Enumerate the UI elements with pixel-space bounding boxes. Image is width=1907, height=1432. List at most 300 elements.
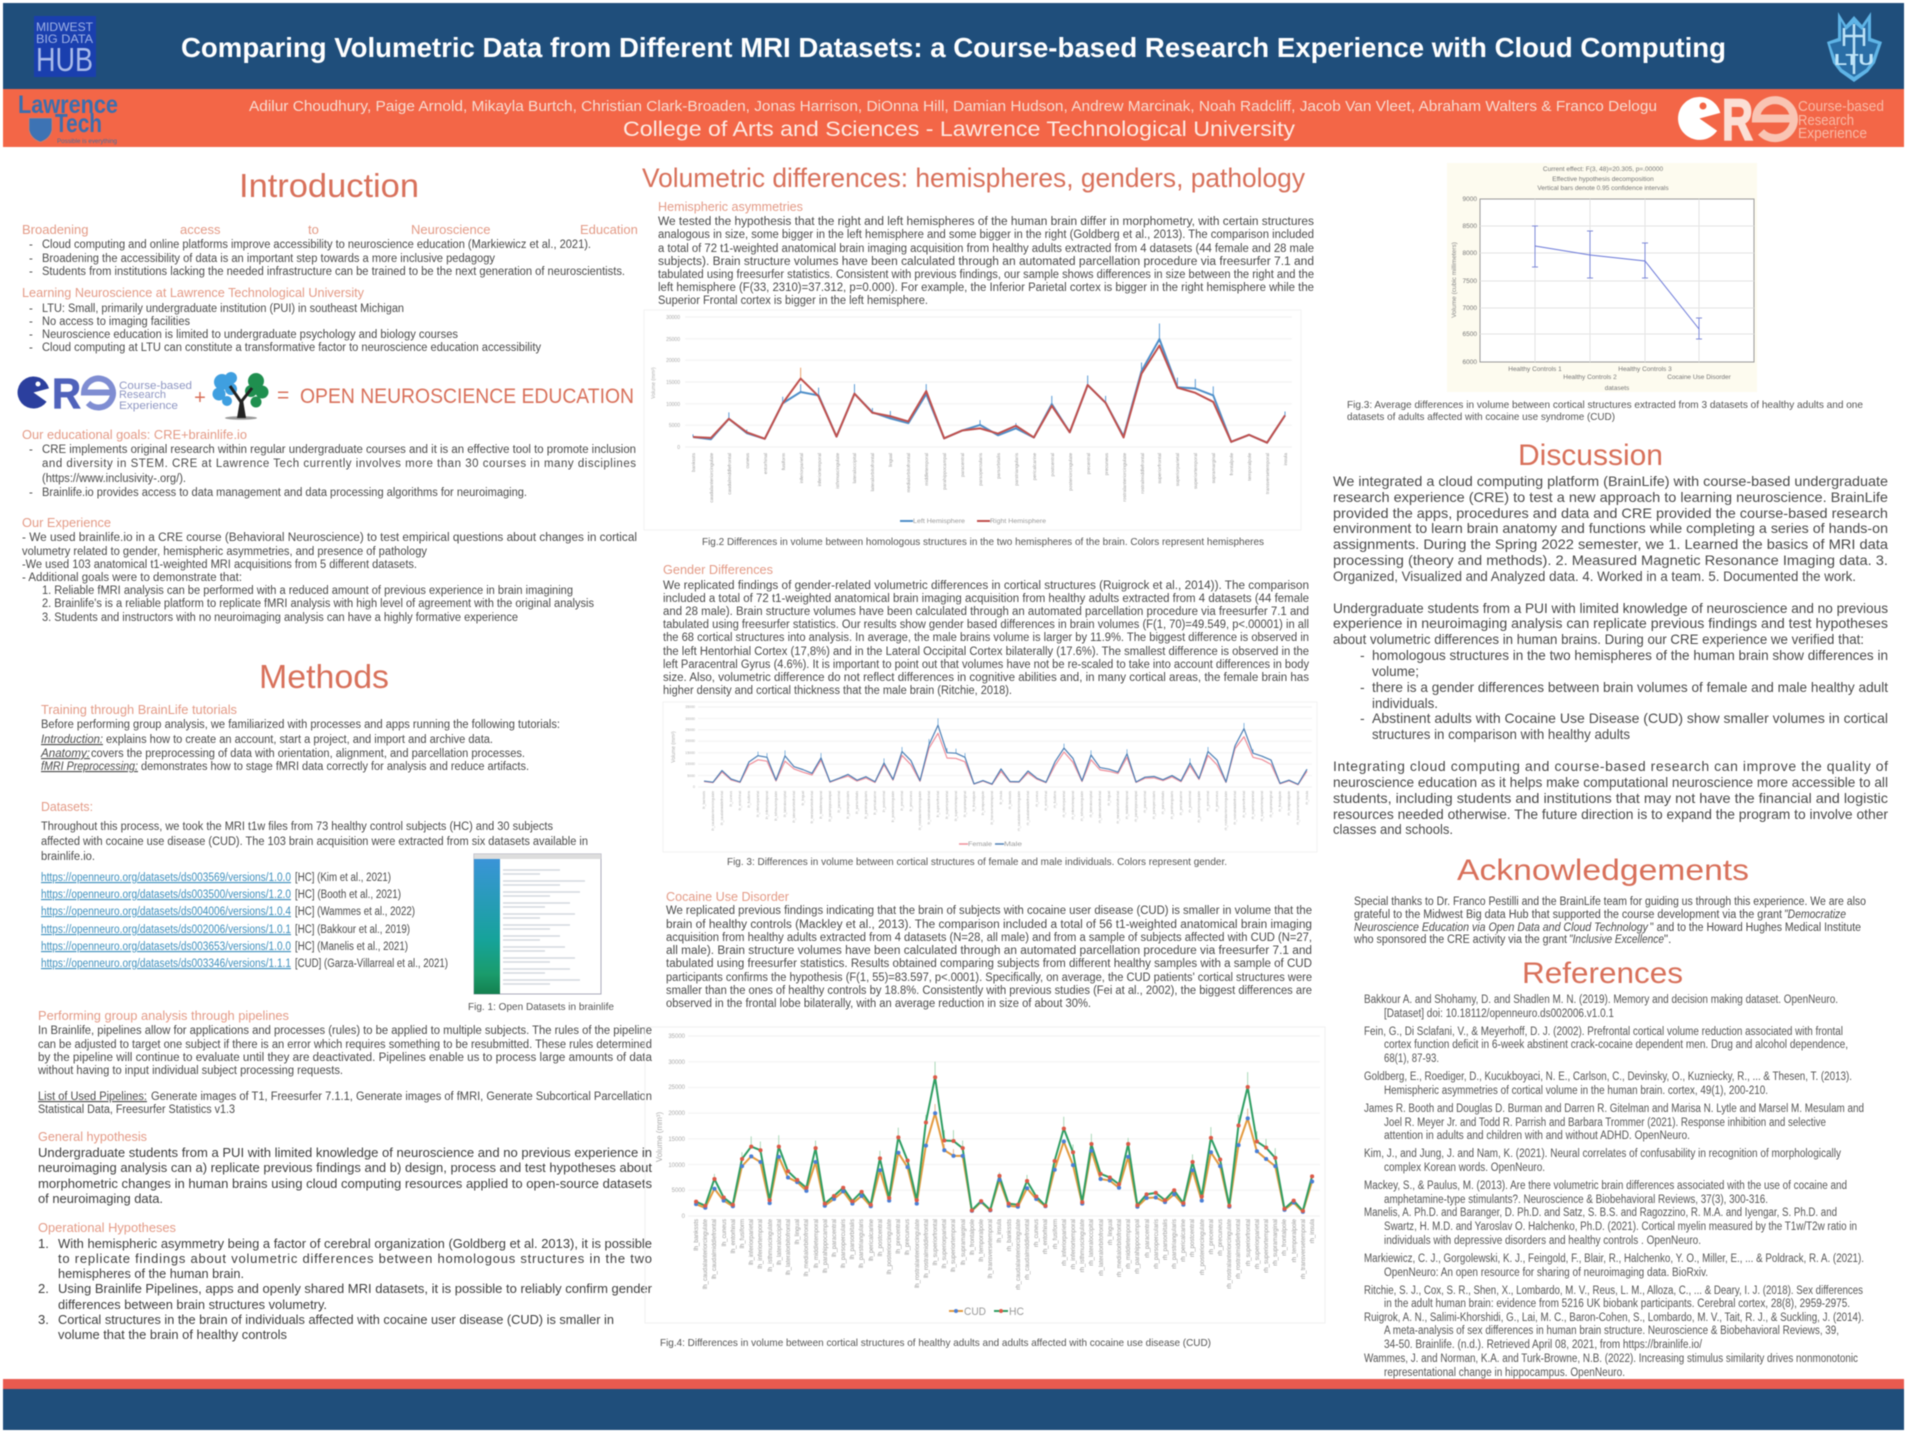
- x axis labels: middletemporal: [924, 453, 930, 486]
- x axis labels: rh_rostralmiddlefrontal: [1233, 791, 1237, 825]
- logo: LTU crest: LTU: [1834, 52, 1874, 69]
- text block: acknowledgements body: ".: [1664, 934, 1671, 946]
- text block: pipelines: Generate images of T1, Freesurfer 7.1.1, Generate images of fMRI, Generate Subcortical Parcellation: [151, 1091, 652, 1103]
- axis tick labels: 5000: [672, 1188, 686, 1194]
- text block: datasets: affected with cocaine use disease (CUD). The 103 brain acquisition were extracted from six datasets available in: [41, 836, 588, 848]
- text block: our experience: - We used brainlife.io in a CRE course (Behavioral Neuroscience) to test empirical questions about changes in cortical: [22, 532, 637, 544]
- x axis labels: lh_posteriorcingulate: [891, 791, 895, 822]
- x axis labels: rh_parsorbitalis: [1163, 1219, 1169, 1260]
- text block: discussion body: there is a gender differences between brain volumes of female and male healthy adult: [1372, 679, 1888, 695]
- text block: educational goals: -: [29, 487, 33, 499]
- text block: discussion body: We integrated a cloud computing platform (BrainLife) with course-based undergraduate: [1333, 473, 1888, 489]
- text block: acknowledgements body: who sponsored the CRE activity via the grant: [1353, 934, 1568, 946]
- text block: our experience: [22, 515, 637, 624]
- text block: gender differences: tabulated using freesurfer statistics. Our results show gender based differences in brain volumes (F(1, 70)=49.549, p<.00001) in all: [663, 619, 1309, 631]
- text block: operational hypotheses: With hemispheric asymmetry being a factor of cerebral organization (Goldberg et al. 2013), it is possible: [58, 1236, 652, 1251]
- text block: discussion body: research experience (CRE) to test a new approach to learning neuroscience. BrainLife: [1333, 489, 1888, 505]
- text block: datasets: [HC] (Manelis et al., 2021): [295, 941, 408, 953]
- x axis labels: rh_parsopercularis: [1152, 791, 1156, 819]
- axis tick labels: 30000: [685, 717, 695, 721]
- x axis labels: rh_inferiortemporal: [1071, 1219, 1077, 1269]
- reference list: 34-50. Brainlife. (n.d.). Retrieved April 08, 2021, from https://brainlife.io/: [1384, 1339, 1703, 1351]
- text block: our experience: - Additional goals were to demonstrate that:: [22, 572, 242, 584]
- caption: figure 4: Fig.4: Differences in volume between cortical structures of healthy adults and adults affected with cocaine use disease (CUD): [660, 1337, 1211, 1349]
- x axis labels: isthmuscingulate: [835, 453, 841, 489]
- text block: discussion body: homologous structures in the two hemispheres of the human brain show differences in: [1372, 647, 1888, 663]
- text block: discussion body: processing (theory and methods). 2. Measured Magnetic Resonance Imaging data. 3.: [1333, 552, 1888, 568]
- x axis labels: rh_caudalanteriorcingulate: [1017, 791, 1021, 831]
- x axis labels: rh_parstriangularis: [1172, 1219, 1178, 1269]
- axis tick labels: 10000: [666, 402, 680, 408]
- x axis labels: lh_caudalmiddlefrontal: [712, 1219, 718, 1279]
- logo: CRE: Experience: [119, 400, 178, 412]
- x axis labels: lh_superiorparietal: [945, 791, 949, 819]
- reference list: OpenNeuro: An open resource for sharing of neuroimaging data. BioRxiv.: [1384, 1267, 1708, 1279]
- x axis labels: rh_entorhinal: [1044, 791, 1048, 811]
- x axis labels: lh_rostralanteriorcingulate: [915, 1218, 921, 1288]
- x axis labels: lh_insula: [997, 1218, 1003, 1243]
- text block: datasets: [41, 799, 588, 970]
- x axis labels: lh_superiorfrontal: [933, 1219, 939, 1265]
- figure: average volume by dataset chart: [1447, 163, 1757, 392]
- header title bar: [3, 3, 1904, 89]
- panel: introduction: [18, 167, 638, 624]
- reference list: representational change in hippocampus. OpenNeuro.: [1384, 1367, 1625, 1379]
- x axis labels: lh_bankssts: [694, 1219, 700, 1251]
- text block: hemispheric asymmetries: analogous in size, some bigger in the left hemisphere and some bigger in the right (Goldberg et al., 2013). The comparison included: [658, 229, 1314, 241]
- x axis labels: lh_lingual: [795, 1219, 801, 1244]
- axis tick labels: 20000: [666, 358, 680, 364]
- x axis labels: lh_parahippocampal: [828, 791, 832, 822]
- x axis labels: rh_precuneus: [1215, 791, 1219, 812]
- x axis labels: rh_isthmuscingulate: [1080, 1218, 1086, 1272]
- text block: datasets: [CUD] (Garza-Villarreal et al., 2021): [295, 958, 448, 970]
- text block: discussion body: Integrating cloud computing and course-based research can improve the quality of: [1333, 758, 1888, 774]
- reference list: A meta-analysis of sex differences in human brain structure. Neuroscience & Biobehavioral Reviews, 39,: [1384, 1325, 1839, 1337]
- text block: learning neuroscience at LTU: -: [29, 303, 33, 315]
- x axis labels: inferiortemporal: [817, 453, 823, 486]
- x axis labels: lingual: [888, 453, 894, 467]
- text block: datasets: [HC] (Booth et al., 2021): [295, 889, 401, 901]
- x axis labels: frontalpole: [1229, 453, 1235, 475]
- text block: acknowledgements body: grateful to the Midwest Big data Hub that supported the course development via the grant: [1354, 909, 1783, 921]
- x axis labels: rh_inferiorparietal: [1062, 1219, 1068, 1266]
- x axis labels: caudalmiddlefrontal: [727, 453, 733, 495]
- text block: hemispheric asymmetries: tabulated using freesurfer statistics. Consistent with previous findings, our sample shows differences in size between the right and the: [658, 269, 1314, 281]
- axis tick labels: [666, 315, 680, 451]
- text block: operational hypotheses: Using Brainlife Pipelines, apps and openly shared MRI datasets, it is possible to reliably confirm gender: [58, 1281, 653, 1296]
- x axis labels: lh_inferiortemporal: [758, 1219, 764, 1269]
- text block: cocaine use disorder: brain of healthy controls (Mackley et al., 2013). The comparison included a total of 56 t1-weighted anatomical brain imaging: [666, 919, 1312, 931]
- x axis labels: lh_inferiorparietal: [749, 1219, 755, 1265]
- x axis labels: lh_parsopercularis: [841, 1219, 847, 1268]
- y tick labels: [1463, 196, 1477, 366]
- x axis labels: rh_superiorparietal: [1251, 791, 1255, 819]
- text block: discussion body: -: [1360, 679, 1365, 695]
- text block: tutorials: Anatomy:: [40, 748, 90, 760]
- logo: Midwest Big Data Hub: HUB: [36, 41, 93, 78]
- x axis labels: entorhinal: [763, 453, 769, 474]
- x axis labels: lh_paracentral: [837, 791, 841, 812]
- x axis labels: rh_parahippocampal: [1135, 1219, 1141, 1274]
- text block: discussion body: individuals.: [1372, 695, 1438, 711]
- x axis labels: pericalcarine: [1032, 453, 1038, 480]
- chart: hemispheres line chart: [644, 310, 1301, 530]
- x axis labels: superiorparietal: [1175, 453, 1181, 486]
- text block: educational goals: CRE implements original research within regular undergraduate courses and it is an effective tool to promote inclusion: [42, 444, 636, 456]
- axis tick labels: 35000: [668, 1034, 686, 1040]
- x axis labels: lh_transversetemporal: [988, 1219, 994, 1278]
- text block: pipelines: [37, 1008, 653, 1116]
- x axis labels: rh_inferiortemporal: [1071, 791, 1075, 819]
- x axis labels: lh_fusiform: [747, 791, 751, 808]
- figure 1: brainlife screenshot: [474, 854, 601, 994]
- chart title: Vertical bars denote 0.95 confidence intervals: [1537, 185, 1669, 192]
- text block: discussion body: classes and schools.: [1333, 821, 1453, 837]
- text block: operational hypotheses: 3.: [38, 1312, 49, 1327]
- x axis labels: rh_bankssts: [1008, 791, 1012, 809]
- x axis labels: [694, 1218, 1316, 1290]
- text block: broadening access: to: [308, 222, 319, 237]
- x axis labels: lh_superiorfrontal: [936, 791, 940, 817]
- text block: learning neuroscience at LTU: -: [29, 316, 33, 328]
- text block: hemispheric asymmetries: left hemisphere (F(33, 2310)=37.312, p=0.000). For example, the Inferior Parietal cortex is bigger in the right hemisphere while the: [658, 282, 1314, 294]
- data series: left and right hemisphere: [693, 324, 1285, 443]
- x axis labels: rh_postcentral: [1190, 1219, 1196, 1257]
- x axis labels: posteriorcingulate: [1068, 453, 1074, 491]
- text block: datasets: [HC] (Bakkour et al., 2019): [295, 924, 410, 936]
- text block: gender differences: and 28 male). Brain structure volumes have been calculated through an automated parcellation procedure via freesurfer 7.1 and: [663, 606, 1309, 618]
- text block: educational goals: and diversity in STEM. CRE at Lawrence Tech currently involves more than 30 courses in many disciplines: [42, 458, 636, 470]
- text block: tutorials: Introduction:: [41, 734, 103, 746]
- text block: gender differences: the 68 cortical structures into analysis. In average, the male brains volume is larger by 11.9%. The biggest difference is observed in: [663, 632, 1309, 644]
- y tick labels: 9000: [1463, 196, 1477, 203]
- x axis labels: lh_superiortemporal: [951, 1219, 957, 1272]
- x axis labels: lh_temporalpole: [981, 791, 985, 815]
- x axis labels: rh_cuneus: [1035, 791, 1039, 807]
- text block: datasets: https://openneuro.org/datasets/ds003653/versions/1.0.0: [41, 941, 291, 953]
- caption: figure 3 datasets: datasets of adults affected with cocaine use syndrome (CUD): [1347, 411, 1615, 423]
- x axis labels: rh_lateralorbitofrontal: [1098, 791, 1102, 823]
- x axis labels: lh_pericalcarine: [873, 791, 877, 815]
- x axis labels: paracentral: [960, 453, 966, 477]
- y axis label: Volume (mm³): [655, 1112, 664, 1162]
- reference list: Kim, J., and Jung, J. and Nam, K. (2021). Neural correlates of confusability in recognition of morphologically: [1364, 1148, 1841, 1160]
- x axis labels: rh_medialorbitofrontal: [1116, 791, 1120, 824]
- x axis labels: lh_frontalpole: [970, 1218, 976, 1255]
- text block: learning neuroscience at LTU: Cloud computing at LTU can constitute a transformative factor to neuroscience education accessibility: [42, 342, 541, 354]
- text block: datasets: Datasets:: [41, 799, 93, 814]
- x axis labels: insula: [1283, 453, 1289, 466]
- panel: volumetric differences: [642, 163, 1325, 1349]
- x axis labels: parstriangularis: [1014, 452, 1020, 486]
- axis tick labels: 35000: [685, 705, 695, 709]
- x axis labels: lh_cuneus: [722, 1219, 728, 1246]
- reference list: individuals with depressive disorders and healthy controls . OpenNeuro.: [1384, 1235, 1701, 1247]
- axis tick labels: 25000: [668, 1085, 686, 1091]
- x axis labels: parsorbitalis: [996, 452, 1002, 479]
- x axis labels: fusiform: [781, 453, 787, 470]
- x axis labels: rh_temporalpole: [1292, 1218, 1298, 1262]
- y tick labels: 8000: [1463, 250, 1477, 257]
- text block: discussion body: neuroscience education as it helps make computational neuroscience more accessible to all: [1333, 774, 1888, 790]
- axis tick labels: [668, 1034, 686, 1220]
- axis tick labels: 20000: [668, 1111, 686, 1117]
- text block: hemispheric asymmetries: Hemispheric asymmetries: [658, 199, 803, 214]
- text block: learning neuroscience at LTU: LTU: Small, primarily undergraduate institution (PUI) in southeast Michigan: [42, 303, 404, 315]
- text block: acknowledgements body: "Democratize: [1784, 909, 1846, 921]
- x axis labels: rh_parsopercularis: [1154, 1219, 1160, 1269]
- text block: educational goals: (https://www.inclusivity-.org/).: [42, 473, 186, 485]
- logo: Midwest Big Data Hub: MIDWEST: [36, 20, 94, 34]
- y tick labels: 7500: [1463, 278, 1477, 285]
- text block: tutorials: covers the preprocessing of data with orientation, alignment, and parcellation processes.: [91, 748, 525, 760]
- x axis labels: rh_rostralanteriorcingulate: [1224, 791, 1228, 830]
- x axis labels: lh_supramarginal: [963, 791, 967, 817]
- x axis labels: rostralmiddlefrontal: [1140, 453, 1146, 494]
- x axis labels: rh_precuneus: [1218, 1219, 1224, 1256]
- panel: acknowledgements: [1353, 854, 1866, 946]
- x axis labels: lh_parsorbitalis: [850, 1219, 856, 1259]
- x axis labels: rh_frontalpole: [1282, 1218, 1288, 1256]
- text block: our experience: 1. Reliable fMRI analysis can be performed with a reduced amount of previous experience in brain imagining: [42, 585, 573, 597]
- x axis labels: rh_fusiform: [1053, 1219, 1059, 1249]
- icon: brainlife tree: [212, 372, 268, 420]
- text block: educational goals: Our educational goals: CRE+brainlife.io: [22, 427, 247, 442]
- x axis labels: superiorfrontal: [1157, 453, 1163, 484]
- text block: our experience: 2. Brainlife's is a reliable platform to replicate fMRI analysis with high level of agreement with the original analysis: [42, 598, 594, 610]
- legend: HC: [1009, 1306, 1024, 1318]
- text block: acknowledgements body: " and to the Howard Hughes Medical Institute: [1650, 922, 1861, 934]
- text block: educational goals: [22, 427, 636, 499]
- x axis labels: rh_superiorfrontal: [1246, 1219, 1252, 1266]
- text block: discussion body: students, including students and institutions that may not have the financial and logistic: [1333, 790, 1888, 806]
- x axis labels: rh_cuneus: [1034, 1219, 1040, 1247]
- text block: discussion body: Undergraduate students from a PUI with limited knowledge of neuroscience and no previous: [1333, 600, 1888, 616]
- chart: gender line chart: [663, 702, 1317, 852]
- x axis labels: rh_temporalpole: [1287, 791, 1291, 816]
- axis tick labels: 10000: [668, 1163, 686, 1169]
- text block: datasets: https://openneuro.org/datasets/ds004006/versions/1.0.4: [41, 906, 292, 918]
- x axis labels: rh_middletemporal: [1126, 1219, 1132, 1269]
- legend: [959, 842, 1023, 848]
- y tick labels: 6000: [1463, 359, 1477, 366]
- axis tick labels: 25000: [666, 337, 680, 343]
- x axis labels: transversetemporal: [1265, 453, 1271, 494]
- x axis labels: rh_pericalcarine: [1179, 791, 1183, 815]
- x axis labels: rh_isthmuscingulate: [1080, 791, 1084, 821]
- text block: operational hypotheses: 1.: [38, 1236, 49, 1251]
- x axis labels: superiortemporal: [1193, 453, 1199, 489]
- axis tick labels: 5000: [687, 774, 695, 778]
- axis tick labels: [685, 705, 695, 789]
- legend: [900, 519, 1047, 525]
- reference list: attention in adults and children with and without ADHD. OpenNeuro.: [1384, 1130, 1690, 1142]
- text block: operational hypotheses: to replicate findings about volumetric differences between homologous structures in the two: [58, 1251, 652, 1266]
- reference list: [1364, 994, 1864, 1379]
- heading: Introduction: Introduction: [239, 167, 419, 204]
- x axis labels: cuneus: [746, 452, 751, 468]
- x axis labels: lh_parsopercularis: [846, 791, 850, 819]
- x axis labels: rh_caudalmiddlefrontal: [1026, 791, 1030, 825]
- logo: Midwest Big Data Hub: BIG DATA: [36, 32, 93, 46]
- text block: broadening access: Students from institutions lacking the needed infrastructure can be trained to be the next generation of neuroscientists.: [42, 266, 625, 278]
- x axis labels: lh_middletemporal: [819, 791, 823, 819]
- text block: broadening access: Neuroscience: [411, 222, 490, 237]
- x axis labels: [702, 791, 1309, 831]
- text block: datasets: Throughout this process, we took the MRI t1w files from 73 healthy control subjects (HC) and 30 subjects: [41, 821, 553, 833]
- x labels: Healthy Controls 3: [1618, 366, 1672, 373]
- text block: datasets: [HC] (Kim et al., 2021): [295, 872, 391, 884]
- legend: Female: [968, 842, 993, 848]
- logo: CRE white: Course-based: [1798, 99, 1884, 115]
- text block: educational goals: -: [29, 444, 33, 456]
- x axis labels: rh_supramarginal: [1269, 791, 1273, 817]
- x axis labels: rh_entorhinal: [1043, 1219, 1049, 1254]
- text block: acknowledgements body: "Inclusive Excellence: [1569, 934, 1664, 946]
- x axis labels: lh_paracentral: [832, 1219, 838, 1257]
- caption: figure 3 gender: Fig. 3: Differences in volume between cortical structures of female and male individuals. Colors represent gender.: [727, 856, 1227, 868]
- y axis label: Volume (mm³): [671, 731, 677, 763]
- text block: discussion body: Abstinent adults with Cocaine Use Disease (CUD) show smaller volumes in cortical: [1372, 710, 1888, 726]
- text block: our experience: -We used 103 anatomical t1-weighted MRI acquisitions from 5 different datasets.: [22, 559, 417, 571]
- text block: gender differences: size. Also, volumetric difference do not reflect differences in cognitive abilities and, in many cortical areas, the female brain has: [663, 672, 1309, 684]
- text block: operational hypotheses: Operational Hypotheses: [38, 1220, 176, 1235]
- logo: CRE: R: [52, 370, 81, 418]
- x axis labels: lh_entorhinal: [731, 1219, 737, 1253]
- equation: CRE + brainlife = open neuroscience education: [18, 370, 634, 420]
- text: open neuroscience education: OPEN NEUROSCIENCE EDUCATION: [300, 385, 634, 408]
- x axis labels: rh_frontalpole: [1278, 791, 1282, 812]
- x axis labels: lh_isthmuscingulate: [774, 791, 778, 821]
- caption: figure 3 datasets: Fig.3: Average differences in volume between cortical structures extracted from 3 datasets of healthy adults and one: [1347, 399, 1863, 411]
- x axis labels: lh_insula: [999, 791, 1003, 804]
- text block: broadening access: access: [180, 222, 221, 237]
- text block: cocaine use disorder: observed in the frontal lobe bilaterally, with an average reduction in size of about 30%.: [666, 998, 1091, 1010]
- text block: cocaine use disorder: all male). Brain structure volumes have been calculated through an automated parcellation procedure via freesurfer 7.1 and: [666, 945, 1312, 957]
- x axis labels: lateralorbitofrontal: [870, 453, 876, 491]
- text block: broadening access: Cloud computing and online platforms improve accessibility to neuroscience education (Markiewicz et al., 2021).: [42, 239, 591, 251]
- text block: general hypothesis: [38, 1129, 652, 1206]
- chart title: Effective hypothesis decomposition: [1552, 176, 1654, 183]
- legend: Left Hemisphere: [913, 519, 966, 525]
- x axis labels: rh_insula: [1310, 1218, 1316, 1243]
- x axis labels: lh_middletemporal: [814, 1219, 820, 1268]
- text block: hemispheric asymmetries: a total of 72 t1-weighted anatomical brain imaging acquisition from healthy adults extracted from 4 datasets (44 female and 28 male: [658, 243, 1314, 255]
- x axis labels: rh_parahippocampal: [1134, 791, 1138, 822]
- logo: Lawrence Tech: [18, 91, 118, 145]
- x axis labels: lh_cuneus: [729, 791, 733, 806]
- text block: datasets: brainlife.io.: [41, 851, 95, 863]
- axis tick labels: 20000: [685, 739, 695, 743]
- chart: cocaine use disorder line chart: [645, 1027, 1325, 1323]
- caption: figure 3 datasets: [1347, 399, 1863, 423]
- text block: broadening access: Broadening the accessibility of data is an important step towards a more inclusive pedagogy: [42, 253, 495, 265]
- text block: discussion body: environment to learn brain anatomy and functions while completing a series of hands-on: [1333, 520, 1888, 536]
- logo: CRE: Research: [119, 389, 166, 401]
- text block: gender differences: [663, 562, 1309, 697]
- markers: CUD: [696, 1113, 1312, 1212]
- text block: cocaine use disorder: acquisition from healthy adults extracted from 4 datasets (N=28, all male) and from a sample of subjects affected with CUD (N=27,: [666, 932, 1312, 944]
- x axis labels: rh_superiorparietal: [1255, 1219, 1261, 1269]
- x axis labels: rh_supramarginal: [1273, 1219, 1279, 1266]
- text block: general hypothesis: General hypothesis: [38, 1129, 147, 1144]
- x axis labels: rh_lingual: [1107, 791, 1111, 806]
- data line with error bars: [1532, 226, 1702, 339]
- chart title: Current effect: F(3, 48)=20.305, p=.00000: [1543, 166, 1663, 173]
- text block: datasets: https://openneuro.org/datasets/ds003569/versions/1.0.0: [41, 872, 291, 884]
- reference list: Hemispheric asymmetries of cortical volume in the human brain. cortex, 49(1), 200-210.: [1384, 1085, 1768, 1097]
- x axis labels: lh_postcentral: [878, 1219, 884, 1256]
- heading: volumetric differences: Volumetric differences: hemispheres, genders, pathology: [642, 163, 1305, 193]
- text block: broadening access: -: [29, 253, 33, 265]
- x axis labels: lh_lateralorbitofrontal: [792, 791, 796, 823]
- text block: cocaine use disorder: tabulated using freesurfer statistics. Results obtained comparing subjects from different healthy samples with a sample of CUD: [666, 958, 1312, 970]
- title: Comparing Volumetric Data from Different MRI Datasets: a Course-based Research Experience with Cloud Computing: [181, 32, 1726, 63]
- text block: broadening access: -: [29, 239, 33, 251]
- data series: female and male: [704, 718, 1307, 785]
- x axis labels: rh_caudalmiddlefrontal: [1025, 1219, 1031, 1280]
- text block: general hypothesis: neuroimaging analysis can a) replicate previous findings and b) design, process and test hypotheses about: [38, 1160, 652, 1175]
- x axis labels: lh_precentral: [896, 1219, 902, 1254]
- text block: general hypothesis: morphometric changes in human brains using cloud computing resources applied to open-source datasets: [38, 1176, 652, 1191]
- x axis labels: rh_posteriorcingulate: [1197, 791, 1201, 823]
- axis tick labels: 15000: [685, 751, 695, 755]
- heading: Methods: Methods: [259, 658, 389, 695]
- x axis labels: lh_inferiortemporal: [765, 791, 769, 819]
- x axis labels: lh_pericalcarine: [869, 1218, 875, 1261]
- x axis labels: lh_medialorbitofrontal: [810, 791, 814, 823]
- chart title: [1537, 166, 1669, 192]
- text block: discussion body: provided the apps, procedures and data and CRE provided the course-based research: [1333, 505, 1888, 521]
- x axis labels: rh_bankssts: [1007, 1219, 1013, 1251]
- axis tick labels: 0: [682, 1214, 686, 1220]
- x axis labels: rh_posteriorcingulate: [1200, 1218, 1206, 1275]
- axis tick labels: 30000: [668, 1060, 686, 1066]
- x axis labels: lh_rostralmiddlefrontal: [927, 791, 931, 824]
- x axis labels: rh_rostralmiddlefrontal: [1236, 1219, 1242, 1279]
- header authors bar: [3, 88, 1904, 153]
- x axis labels: lh_precuneus: [909, 791, 913, 811]
- authors: Adilur Choudhury, Paige Arnold, Mikayla Burtch, Christian Clark-Broaden, Jonas Harrison, DiOnna Hill, Damian Hudson, Andrew Marcinak, Noah Radcliff, Jacob Van Vleet, Abraham Walters & Franco Delogu: [249, 99, 1657, 115]
- logo: CRE white: [1678, 88, 1884, 153]
- x axis labels: rh_insula: [1305, 791, 1309, 805]
- x axis labels: rh_precentral: [1206, 791, 1210, 811]
- text block: broadening access: Education: [580, 222, 638, 237]
- text block: operational hypotheses: volume that the brain of healthy controls: [58, 1327, 287, 1342]
- x axis labels: lh_entorhinal: [738, 791, 742, 810]
- text block: discussion body: experience in neuroimaging analysis can replicate previous findings and test hypotheses: [1333, 615, 1888, 631]
- reference list: [Dataset] doi: 10.18112/openneuro.ds002006.v1.0.1: [1384, 1008, 1614, 1020]
- x labels: Healthy Controls 2: [1563, 374, 1617, 381]
- text block: hemispheric asymmetries: We tested the hypothesis that the right and left hemispheres of the human brain differ in morphometry, with certain structures: [658, 216, 1314, 228]
- x axis labels: lh_transversetemporal: [990, 791, 994, 825]
- x axis labels: lh_lingual: [801, 791, 805, 805]
- reference list: cortex function deficit in 6-week abstinent crack-cocaine dependent men. Drug and alcohol dependence,: [1384, 1039, 1848, 1051]
- panel: references: [1364, 957, 1864, 1379]
- x axis labels: rh_parsorbitalis: [1161, 791, 1165, 814]
- x axis labels: inferiorparietal: [799, 453, 805, 483]
- heading: References: References: [1522, 957, 1683, 990]
- text block: our experience: volumetry related to gender, hemispheric asymmetries, and presence of pathology: [22, 546, 427, 558]
- x axis labels: postcentral: [1050, 453, 1056, 476]
- text block: hemispheric asymmetries: Superior Frontal cortex is bigger in the left hemisphere.: [658, 295, 928, 307]
- axis tick labels: 25000: [685, 728, 695, 732]
- text block: gender differences: higher density and cortical thickness that the male brain (Ritchie, 2018).: [663, 685, 1012, 697]
- text block: cocaine use disorder: Cocaine Use Disorder: [666, 889, 790, 904]
- text block: discussion body: about volumetric differences in human brains. During our CRE experience we verified that:: [1333, 631, 1864, 647]
- text block: gender differences: left Paracentral Gyrus (4.6%). It is important to point out that volumes have not be re-scaled to take into account differences in body: [663, 659, 1309, 671]
